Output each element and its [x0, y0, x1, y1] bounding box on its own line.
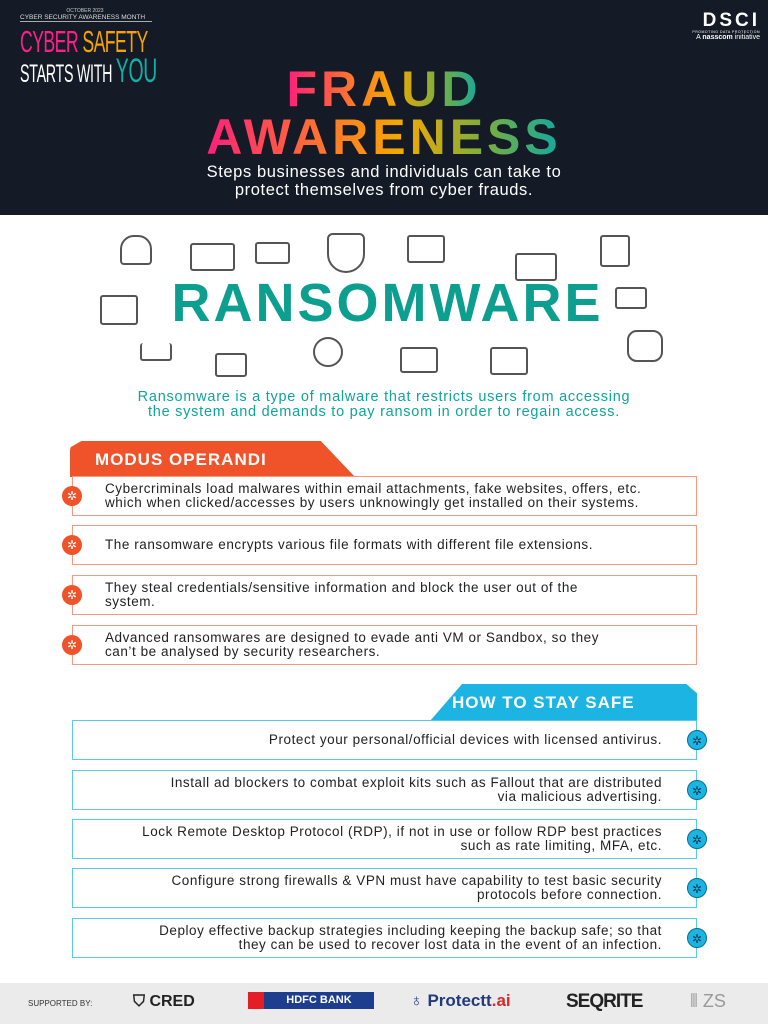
subtitle: protect themselves from cyber frauds. — [235, 181, 533, 199]
safe item 2: via malicious advertising. — [498, 789, 662, 804]
definition text: the system and demands to pay ransom in order to regain access. — [148, 404, 620, 420]
modus item 3 — [72, 575, 697, 615]
safe item 5 — [72, 918, 697, 958]
title: AWARENESS — [206, 109, 562, 165]
safe item 3: Lock Remote Desktop Protocol (RDP), if not in use or follow RDP best practices — [142, 824, 662, 839]
safe item 4: Configure strong firewalls & VPN must have capability to test basic security — [172, 873, 662, 888]
safe item 5: Deploy effective backup strategies including keeping the backup safe; so that — [159, 923, 662, 938]
modus item 1 — [72, 476, 697, 516]
cyber safety logo: STARTS WITH YOU — [20, 52, 157, 90]
safe item 1 — [72, 720, 697, 760]
modus item 2: ✲ — [67, 538, 77, 552]
modus operandi tab — [70, 441, 355, 477]
footer sponsors: HDFC BANK — [286, 994, 352, 1006]
modus item 1: which when clicked/accesses by users unknowingly get installed on their systems. — [105, 495, 639, 510]
title — [206, 61, 562, 165]
DSCI logo — [692, 10, 760, 41]
modus item 4: can’t be analysed by security researchers. — [105, 644, 380, 659]
title: FRAUD — [286, 61, 481, 117]
modus item 1: Cybercriminals load malwares within email attachments, fake websites, offers, etc. — [105, 481, 641, 496]
cyber safety logo: OCTOBER 2023 — [66, 8, 104, 14]
safe item 4 — [72, 868, 697, 908]
ransomware illustration — [100, 233, 663, 377]
modus item 3: They steal credentials/sensitive information and block the user out of the — [105, 580, 578, 595]
footer sponsors: SUPPORTED BY: — [28, 999, 92, 1008]
safe item 3: ✲ — [692, 833, 702, 847]
ransomware word: RANSOMWARE — [172, 273, 604, 333]
subtitle: Steps businesses and individuals can take to — [207, 163, 561, 181]
modus item 2: The ransomware encrypts various file formats with different file extensions. — [105, 537, 593, 552]
footer sponsors: ⦀ ZS — [690, 991, 726, 1011]
safe item 5: they can be used to recover lost data in the event of an infection. — [239, 937, 662, 952]
modus item 3: ✲ — [67, 588, 77, 602]
DSCI logo: PROMOTING DATA PROTECTION — [692, 30, 760, 34]
cyber safety logo: CYBER SECURITY AWARENESS MONTH — [20, 14, 145, 21]
cyber safety logo — [20, 8, 157, 90]
modus item 1: ✲ — [67, 489, 77, 503]
modus item 4 — [72, 625, 697, 665]
safe item 1: Protect your personal/official devices with licensed antivirus. — [269, 732, 662, 747]
DSCI logo: A nasscom initiative — [696, 34, 760, 41]
safe item 5: ✲ — [692, 932, 702, 946]
footer sponsors — [0, 983, 768, 1024]
modus item 2 — [72, 525, 697, 565]
footer sponsors: ⛉ CRED — [133, 993, 195, 1010]
stay safe tab: HOW TO STAY SAFE — [452, 693, 635, 712]
safe item 4: ✲ — [692, 882, 702, 896]
safe item 2 — [72, 770, 697, 810]
definition text — [138, 389, 630, 420]
footer sponsors: ♁ Protectt.ai — [410, 991, 511, 1010]
safe item 2: Install ad blockers to combat exploit kits such as Fallout that are distributed — [171, 775, 662, 790]
subtitle — [207, 163, 561, 199]
footer sponsors: SEQRITE — [566, 991, 642, 1012]
safe item 3: such as rate limiting, MFA, etc. — [461, 838, 662, 853]
safe item 2: ✲ — [692, 784, 702, 798]
stay safe tab — [430, 684, 697, 721]
definition text: Ransomware is a type of malware that restricts users from accessing — [138, 389, 630, 405]
safe item 3 — [72, 819, 697, 859]
safe item 4: protocols before connection. — [477, 887, 662, 902]
DSCI logo: DSCI — [703, 10, 760, 31]
modus item 3: system. — [105, 594, 155, 609]
safe item 1: ✲ — [692, 734, 702, 748]
modus item 4: Advanced ransomwares are designed to evade anti VM or Sandbox, so they — [105, 630, 599, 645]
header banner — [0, 0, 768, 215]
modus operandi tab: MODUS OPERANDI — [95, 450, 267, 469]
modus item 4: ✲ — [67, 638, 77, 652]
cyber safety logo: CYBER SAFETY — [20, 24, 148, 59]
